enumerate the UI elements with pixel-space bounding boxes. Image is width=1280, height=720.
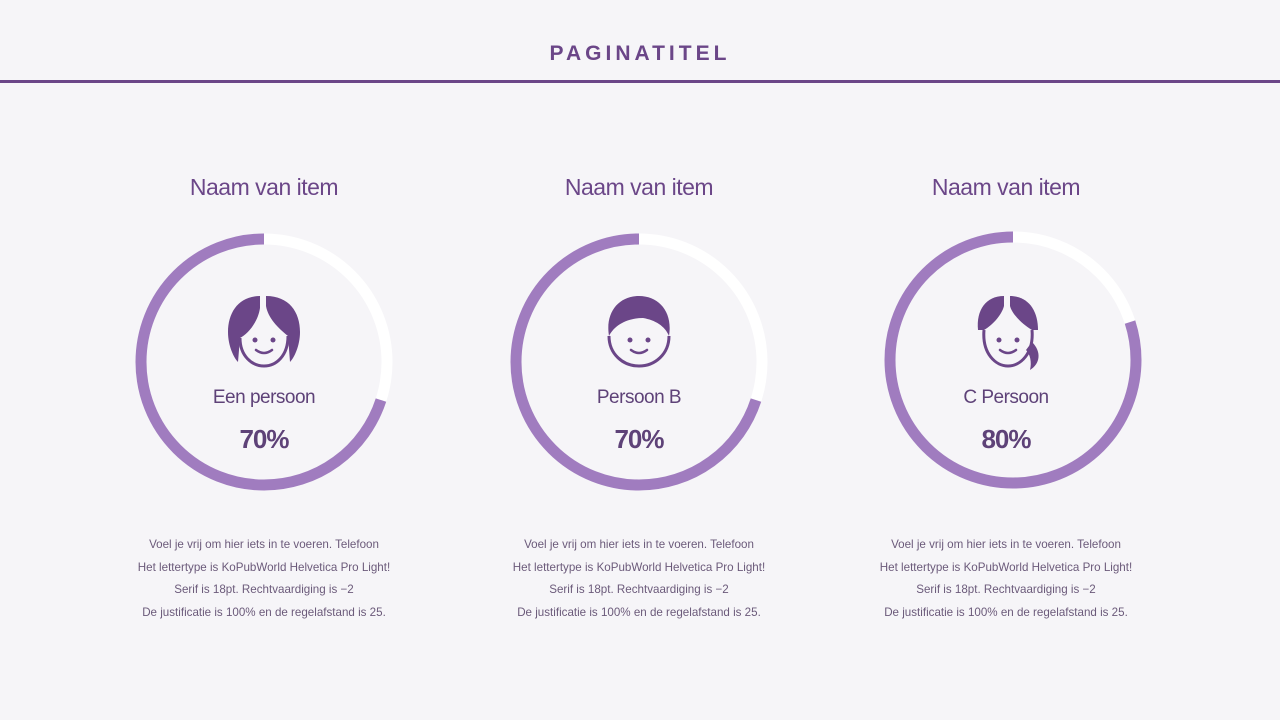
text 3 xyxy=(880,538,1132,618)
ring chart 2 xyxy=(510,234,768,490)
text 2: De justificatie is 100% en de regelafstand is 25. xyxy=(517,606,761,618)
text 2: Voel je vrij om hier iets in te voeren. Telefoon xyxy=(524,538,754,551)
label 1: Een persoon xyxy=(213,387,315,408)
icon: woman bob xyxy=(228,296,300,366)
text 2: Serif is 18pt. Rechtvaardiging is −2 xyxy=(549,583,729,596)
text 3: Serif is 18pt. Rechtvaardiging is −2 xyxy=(916,583,1096,596)
icon: boy xyxy=(608,296,670,366)
text 3: Het lettertype is KoPubWorld Helvetica Pro Light! xyxy=(880,560,1132,574)
heading 1: Naam van item xyxy=(190,174,338,200)
text 3: De justificatie is 100% en de regelafstand is 25. xyxy=(884,606,1128,618)
title: PAGINATITEL xyxy=(550,42,730,65)
text 1 xyxy=(138,538,390,618)
text 3: Voel je vrij om hier iets in te voeren. Telefoon xyxy=(891,538,1121,551)
text 1: Het lettertype is KoPubWorld Helvetica Pro Light! xyxy=(138,560,390,574)
text 2: Het lettertype is KoPubWorld Helvetica Pro Light! xyxy=(513,560,765,574)
panel: item 3 xyxy=(880,174,1142,618)
value 3: 80% xyxy=(981,424,1031,454)
label 3: C Persoon xyxy=(963,387,1049,408)
text 1: Voel je vrij om hier iets in te voeren. Telefoon xyxy=(149,538,379,551)
heading 3: Naam van item xyxy=(932,174,1080,200)
panel: item 2 xyxy=(510,174,768,618)
icon: woman ponytail xyxy=(978,296,1039,370)
heading 2: Naam van item xyxy=(565,174,713,200)
ring chart 1 xyxy=(136,234,392,490)
value 2: 70% xyxy=(614,424,664,454)
value 1: 70% xyxy=(239,424,289,454)
text 1: De justificatie is 100% en de regelafstand is 25. xyxy=(142,606,386,618)
ring chart 3 xyxy=(884,232,1142,488)
panel: item 1 xyxy=(136,174,392,618)
text 1: Serif is 18pt. Rechtvaardiging is −2 xyxy=(174,583,354,596)
text 2 xyxy=(513,538,765,618)
label 2: Persoon B xyxy=(597,387,681,408)
